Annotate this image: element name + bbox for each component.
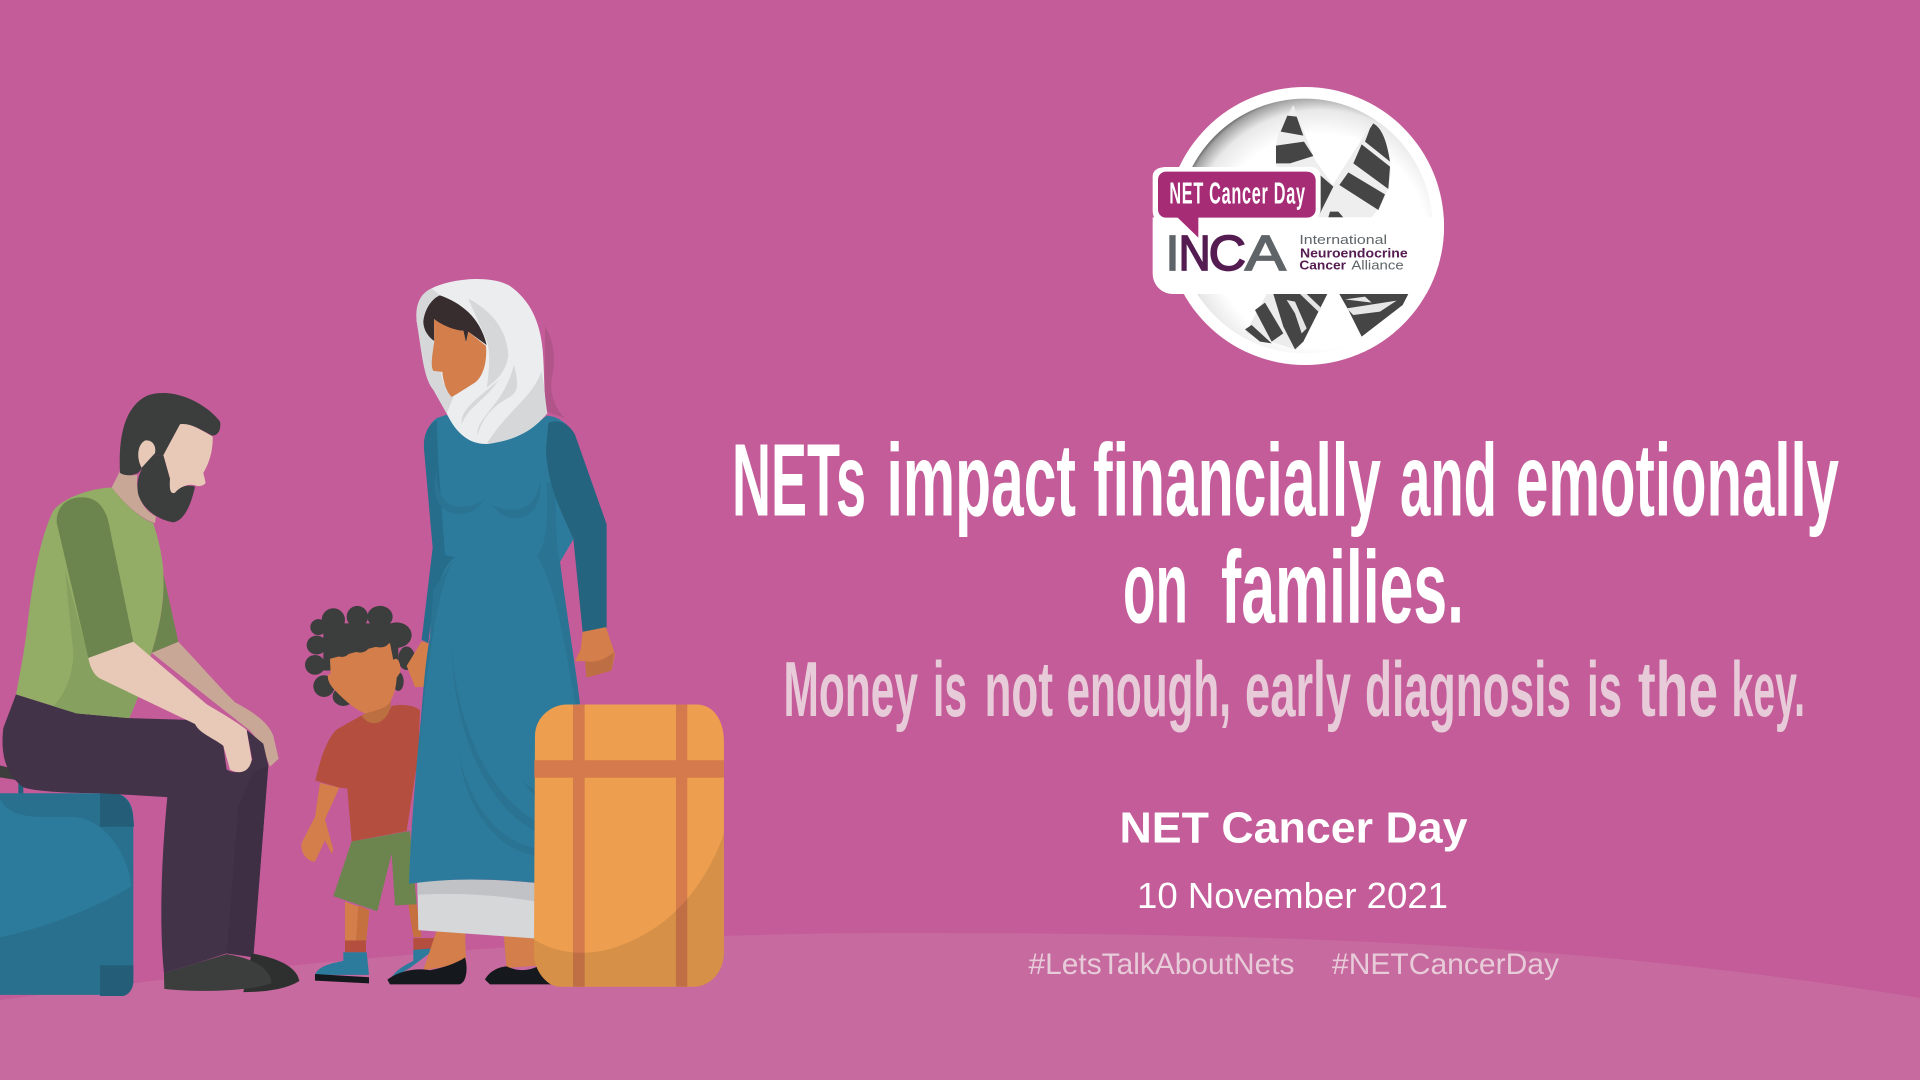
man: shoes [164,953,299,992]
logo: alliance name [1299,232,1408,272]
man: trousers [2,694,268,973]
child [301,606,437,983]
subheading: enough, [1066,645,1231,733]
mother: carrying hand [575,627,615,678]
subheading: not [984,645,1053,733]
ground wave [0,933,1920,1080]
subheading: is [1587,645,1622,733]
logo: INCA wordmark [1166,226,1286,281]
logo: white band [1153,217,1444,294]
subheading: key. [1732,645,1805,733]
logo: INCA wordmark: I [1166,226,1179,281]
icon: zebra ribbon [1245,105,1408,350]
man: neck and head [112,393,220,523]
subheading [784,645,1805,733]
logo: INCA NET Cancer Day badge [1153,87,1444,365]
event date: 10 November 2021 [1137,875,1448,916]
man: front arm [88,642,252,772]
heading line 1: NETs [732,422,866,538]
subheading: Money [784,645,918,733]
mother: legs and shoes [387,925,553,984]
heading line 1 [732,422,1839,538]
subheading: is [933,645,967,733]
logo: alliance name: Alliance [1351,257,1404,272]
hashtag: NETCancerDay: #NETCancerDay [1332,948,1559,981]
subheading: diagnosis [1365,645,1571,733]
logo circle [1166,87,1444,365]
logo: INCA wordmark: A [1245,226,1286,281]
heading line 2 [1123,530,1464,644]
logo: alliance name: Neuroendocrine [1300,245,1408,260]
hashtag: LetsTalkAboutNets: #LetsTalkAboutNets [1028,948,1294,981]
mother: teal dress [409,415,607,884]
mother: white under-skirt [417,880,537,939]
subheading: the [1638,645,1718,733]
heading line 1: financially [1093,422,1381,538]
heading line 1: and [1400,422,1497,538]
mother: holding hand [407,641,428,687]
mother: head and headscarf [416,279,547,444]
logo: speech bubble: NET Cancer Day [1169,177,1305,211]
logo: INCA wordmark: C [1209,226,1246,281]
logo: alliance name: International [1299,232,1387,247]
icon: teal suitcase [0,766,134,996]
man: back arm [152,642,279,767]
illustration: mother, child and orange suitcase [301,279,724,987]
man: green shirt [16,488,178,718]
icon: orange suitcase [534,705,724,987]
event name: NET Cancer Day [1120,804,1468,852]
heading line 2: on [1123,530,1188,644]
illustration: seated man on suitcase [0,393,299,996]
heading line 1: impact [886,422,1076,538]
scarf shadow [545,326,565,418]
logo: speech bubble [1153,167,1321,238]
logo: alliance name: Cancer [1299,257,1346,272]
logo: INCA wordmark: N [1179,226,1211,281]
subheading: early [1245,645,1351,733]
heading line 2: families. [1221,530,1464,644]
